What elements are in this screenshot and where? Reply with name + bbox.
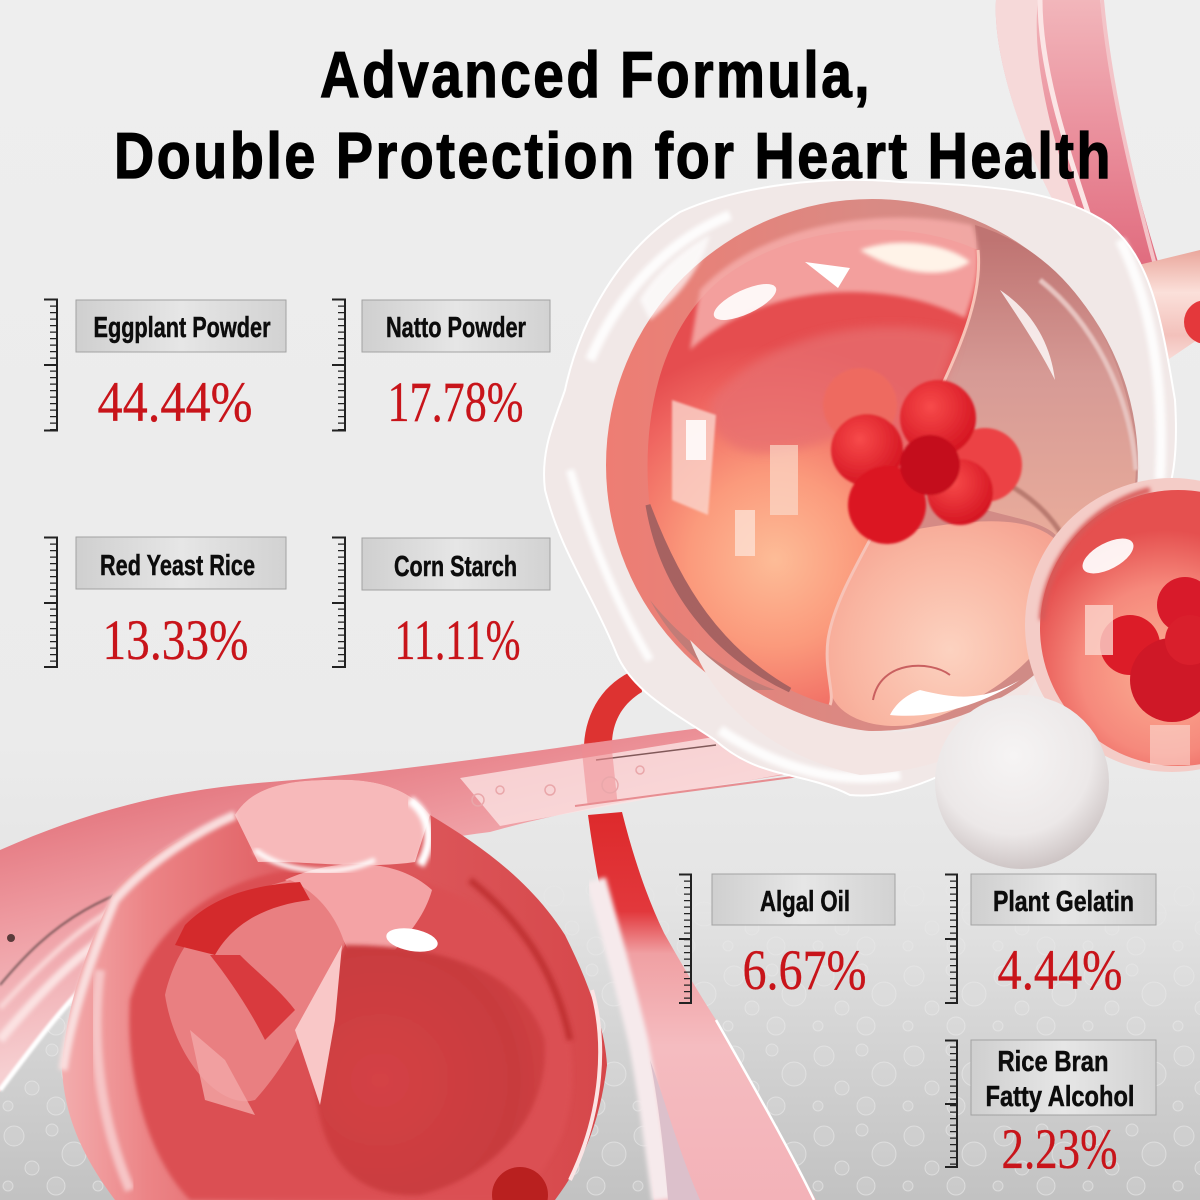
dark crescent <box>648 505 790 690</box>
ingredient: Plant Gelatin: 4.44% <box>998 939 1122 1002</box>
sphere: white ball <box>935 695 1109 869</box>
upper lobe <box>711 327 958 470</box>
right rim light <box>1040 280 1136 470</box>
ingredient: Natto Powder <box>332 299 550 434</box>
background <box>0 901 1200 1200</box>
outer white membrane <box>544 180 1176 796</box>
lower right peach chamber <box>827 521 1070 726</box>
membrane folds <box>570 215 1161 778</box>
ingredient: Rice Bran Fatty Alcohol: 2.23% <box>1002 1118 1118 1181</box>
tube: right <box>1118 250 1200 372</box>
bottom highlight <box>890 680 1020 716</box>
ingredient: Corn Starch: Corn Starch <box>394 551 517 583</box>
ingredient: Algal Oil: 6.67% <box>742 939 866 1002</box>
ingredient: Red Yeast Rice: Red Yeast Rice <box>100 550 255 582</box>
upper right chamber <box>905 225 1136 610</box>
ingredient: Natto Powder: Natto Powder <box>386 312 526 344</box>
central seam <box>827 250 979 705</box>
ingredient: Algal Oil <box>679 874 895 1003</box>
white lower rim <box>690 640 1040 775</box>
ingredient: Red Yeast Rice <box>44 537 286 672</box>
left chamber <box>648 230 979 705</box>
ingredient: Corn Starch <box>332 537 550 672</box>
ingredient: Corn Starch: 11.11% <box>394 609 520 672</box>
organ: lower left sphere <box>62 780 607 1200</box>
sphere body <box>606 199 1138 731</box>
ribbon: pink sweep <box>0 728 805 1092</box>
ingredient: Algal Oil: Algal Oil <box>760 886 850 918</box>
sphere: large capsule <box>544 180 1176 796</box>
ingredient: Rice Bran Fatty Alcohol: Fatty Alcohol <box>986 1081 1134 1113</box>
ingredient: Red Yeast Rice: 13.33% <box>102 609 248 672</box>
window reflections <box>672 400 716 515</box>
ribbon: red vertical <box>584 668 816 1200</box>
top glossy band <box>690 218 978 350</box>
ingredient: Plant Gelatin: Plant Gelatin <box>993 886 1134 918</box>
ingredient: Rice Bran Fatty Alcohol <box>945 1040 1156 1181</box>
ingredient: Plant Gelatin <box>945 874 1156 1003</box>
title <box>114 38 1113 192</box>
red cell cluster <box>823 368 1022 544</box>
ingredient: Rice Bran Fatty Alcohol: Rice Bran <box>998 1046 1108 1078</box>
ingredient: Eggplant Powder: 44.44% <box>98 371 252 434</box>
ingredient: Eggplant Powder: Eggplant Powder <box>94 312 270 344</box>
ribbon: top right <box>996 0 1158 272</box>
ingredient: Eggplant Powder <box>44 299 286 434</box>
title: Advanced Formula, <box>320 38 872 111</box>
sphere: small capsule <box>1025 478 1200 772</box>
ingredient: Natto Powder: 17.78% <box>388 371 524 434</box>
